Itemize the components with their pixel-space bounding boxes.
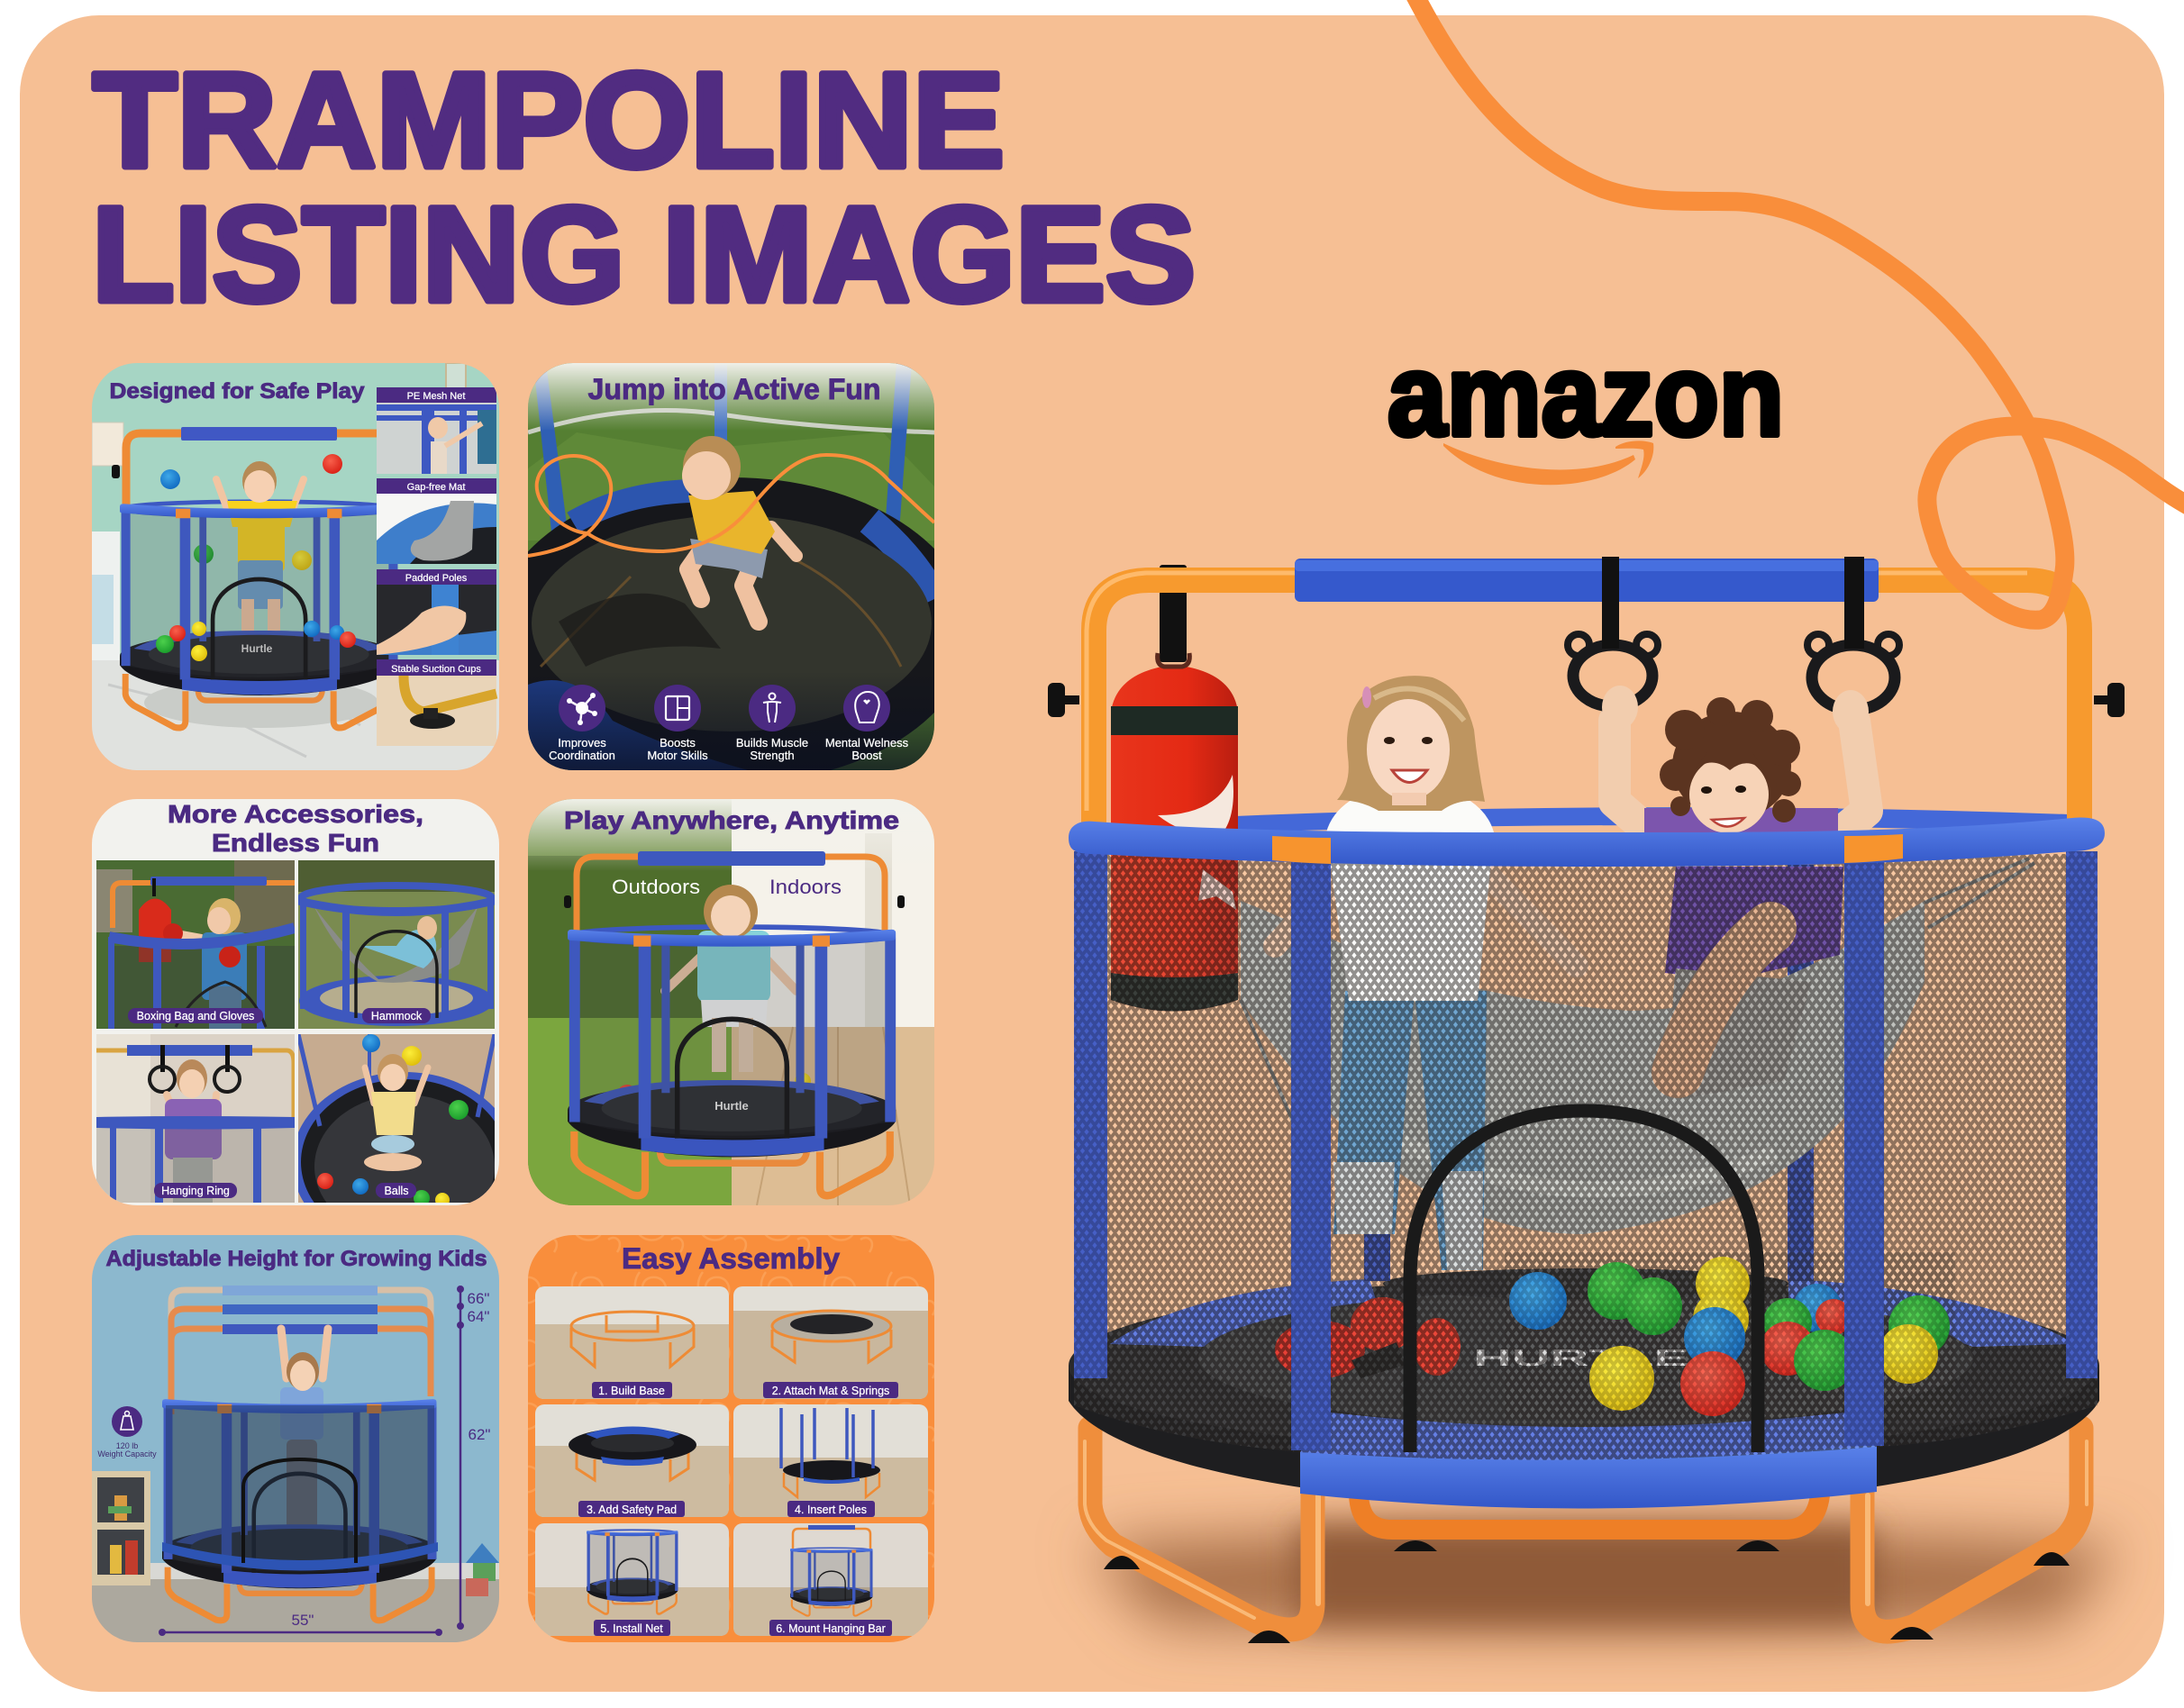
gloves and logo beneath net: HURTLE: [1473, 1344, 1689, 1371]
heading: Jump into Active Fun: [587, 373, 881, 405]
tile: balls: [298, 1034, 495, 1203]
gloves and logo beneath net: [1275, 1297, 1689, 1378]
balls: [1505, 1252, 1955, 1419]
height frames: [171, 1286, 431, 1414]
label: hammock: Hammock: [371, 1010, 423, 1022]
step 3 safety pad: [535, 1404, 729, 1517]
front rim: [1069, 817, 2105, 867]
weight capacity: Weight Capacity: [97, 1449, 157, 1458]
label: hanging ring: [154, 1183, 237, 1198]
dimension lines: 64": [468, 1308, 489, 1325]
back poles: [1364, 865, 1390, 1281]
boy: [1615, 697, 1867, 1099]
step 5 install net: 5. Install Net: [600, 1622, 663, 1635]
panel: jump into active fun: [528, 363, 934, 770]
heading: Endless Fun: [212, 829, 379, 857]
hammock: [1241, 859, 2034, 1234]
label: balls: [376, 1183, 416, 1198]
callout: PE mesh net: PE Mesh Net: [407, 391, 465, 402]
step 4 insert poles: [733, 1404, 928, 1517]
icon: muscle strength: [749, 685, 796, 731]
zipper door arch: [1410, 1111, 1758, 1452]
label: indoors: Indoors: [769, 876, 842, 898]
punching bag: [1111, 565, 1238, 1011]
benefit labels: Boost: [851, 749, 882, 762]
trampoline legs: [1085, 1428, 2087, 1631]
step 6 mount hanging bar: [733, 1523, 928, 1636]
panel: more accessories: [92, 799, 517, 1252]
step 6 mount hanging bar: 6. Mount Hanging Bar: [776, 1622, 886, 1635]
dimension lines: 62": [469, 1426, 490, 1443]
suction feet: [1104, 1540, 2070, 1643]
icon: mental wellness: [843, 685, 890, 731]
callout: stable suction cups: [377, 659, 496, 746]
amazon logo: amazon: [1388, 332, 1784, 460]
label: hammock: [362, 1008, 431, 1023]
label: boxing bag and gloves: Boxing Bag and Gloves: [137, 1010, 254, 1022]
weight capacity: 120 lb: [116, 1441, 138, 1450]
callout: padded poles: Padded Poles: [405, 573, 468, 584]
step 2 attach mat: [733, 1286, 928, 1399]
benefit labels: Mental Welness: [825, 736, 909, 750]
label: outdoors: Outdoors: [612, 876, 700, 898]
callout: gap-free mat: [377, 478, 496, 564]
dimension lines: [159, 1286, 490, 1636]
step 1 build base: 1. Build Base: [598, 1385, 665, 1397]
benefit labels: Boosts: [660, 736, 696, 750]
label: balls: Balls: [384, 1185, 409, 1197]
step 4 insert poles: 4. Insert Poles: [795, 1504, 867, 1516]
panel: easy assembly: [528, 1235, 934, 1642]
callout: stable suction cups: Stable Suction Cups: [391, 664, 481, 675]
panel: adjustable height: [92, 1235, 499, 1642]
girl: [1275, 676, 1577, 1270]
tile: boxing bag: [96, 860, 295, 1029]
heading: Play Anywhere, Anytime: [564, 806, 899, 834]
weight capacity: [97, 1406, 157, 1458]
child jumping: [665, 885, 796, 1072]
benefit labels: Strength: [750, 749, 795, 762]
panel: play anywhere: [528, 799, 934, 1205]
panel: designed for safe play: Hurtle: [241, 642, 273, 655]
orange ribbon: [528, 455, 934, 556]
heading: More Accessories,: [168, 800, 423, 828]
panel: designed for safe play: [92, 363, 499, 770]
heading: Adjustable Height for Growing Kids: [106, 1247, 487, 1271]
child jumping: [682, 436, 796, 622]
title: LISTING IMAGES: [92, 178, 1196, 330]
callout: gap-free mat: Gap-free Mat: [407, 482, 465, 493]
orange ribbon: [1415, 0, 2184, 620]
benefit labels: Improves: [558, 736, 606, 750]
rim joints: [1272, 834, 1903, 864]
icon: coordination: [559, 685, 605, 731]
title: [92, 44, 1196, 330]
floor shadow: [1090, 1527, 2117, 1632]
callout: padded poles: [377, 569, 496, 655]
step 1 build base: [535, 1286, 729, 1399]
hanging rings: [1568, 634, 1899, 710]
back rim: [1117, 807, 2068, 838]
hanging bar frame: [1087, 573, 2079, 824]
dimension lines: 66": [468, 1290, 489, 1307]
callout: PE mesh net: [377, 387, 496, 474]
panel: play anywhere: Hurtle: [714, 1099, 749, 1113]
benefit labels: Coordination: [549, 749, 615, 762]
height knobs: [1048, 683, 2125, 717]
main trampoline: [1048, 557, 2125, 1643]
foam pad: [1295, 559, 1879, 602]
step 2 attach mat: 2. Attach Mat & Springs: [772, 1385, 889, 1397]
step 3 safety pad: 3. Add Safety Pad: [587, 1504, 677, 1516]
dimension lines: 55": [292, 1612, 314, 1629]
child hanging: [280, 1329, 328, 1534]
heading: [168, 800, 423, 857]
tile: hammock: [298, 860, 495, 1029]
step 5 install net: [535, 1523, 729, 1636]
base pad: [1069, 1366, 2099, 1508]
safety net: [1074, 854, 2098, 1460]
benefit labels: Builds Muscle: [736, 736, 808, 750]
heading: Easy Assembly: [622, 1242, 840, 1275]
title: TRAMPOLINE: [93, 44, 1005, 195]
benefit labels: [549, 736, 909, 762]
label: hanging ring: Hanging Ring: [161, 1185, 230, 1197]
front poles: [1074, 851, 2098, 1450]
benefit labels: Motor Skills: [647, 749, 708, 762]
tile: hanging ring: [96, 1034, 295, 1203]
icon: motor skills: [654, 685, 701, 731]
heading: Designed for Safe Play: [110, 379, 365, 404]
